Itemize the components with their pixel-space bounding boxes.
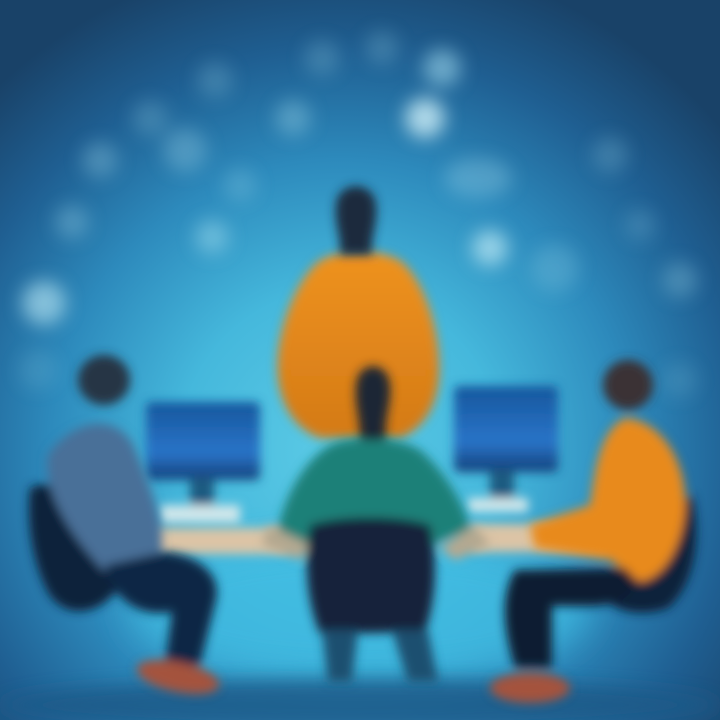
standing person in orange <box>277 186 439 438</box>
head <box>603 360 653 410</box>
chair legs <box>322 630 438 682</box>
head <box>78 355 130 405</box>
floor shadow <box>0 679 720 720</box>
desks <box>150 524 610 554</box>
right person <box>490 360 696 703</box>
trousers <box>105 552 217 665</box>
left person <box>29 355 222 700</box>
left monitor <box>146 402 260 523</box>
floating data particles <box>18 31 698 398</box>
teal shirt <box>278 438 470 545</box>
trousers <box>505 568 634 668</box>
orange torso <box>277 252 439 438</box>
head <box>336 186 376 255</box>
orange shirt <box>530 418 685 582</box>
chair <box>600 495 696 613</box>
head <box>356 366 390 440</box>
glow behind desks <box>130 540 590 680</box>
right monitor <box>454 386 558 512</box>
center seated person <box>262 366 490 682</box>
shoe <box>490 673 570 703</box>
chair <box>29 485 120 611</box>
arms on desk <box>262 525 490 560</box>
shirt <box>47 424 162 572</box>
shoe <box>134 654 222 700</box>
chair <box>307 518 435 634</box>
